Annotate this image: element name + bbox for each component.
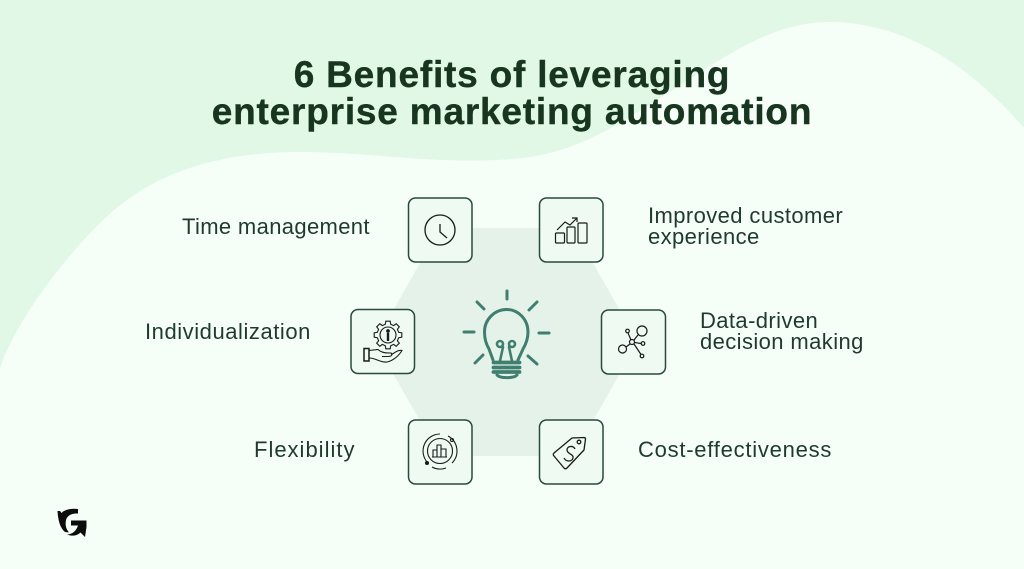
box: hand with gear xyxy=(351,310,414,374)
label: data-driven decision making: Data-driven xyxy=(700,308,818,333)
label: flexibility: Flexibility xyxy=(254,437,355,462)
label: improved customer experience: experience xyxy=(648,224,760,249)
icon: light bulb xyxy=(464,291,549,378)
box: circular bar chart xyxy=(408,420,472,484)
label: data-driven decision making xyxy=(700,308,864,354)
box: clock xyxy=(408,198,472,262)
box: network nodes xyxy=(602,310,666,374)
box: growth chart xyxy=(540,198,603,262)
label: improved customer experience: Improved customer xyxy=(648,203,843,228)
title: enterprise marketing automation xyxy=(212,91,812,132)
label: improved customer experience xyxy=(648,203,843,249)
label: cost-effectiveness: Cost-effectiveness xyxy=(638,437,832,462)
label: data-driven decision making: decision making xyxy=(700,329,864,354)
box: price tag xyxy=(540,420,603,484)
title xyxy=(212,54,812,132)
title: 6 Benefits of leveraging xyxy=(294,54,730,95)
label: individualization: Individualization xyxy=(145,319,311,344)
label: time management: Time management xyxy=(182,214,370,239)
